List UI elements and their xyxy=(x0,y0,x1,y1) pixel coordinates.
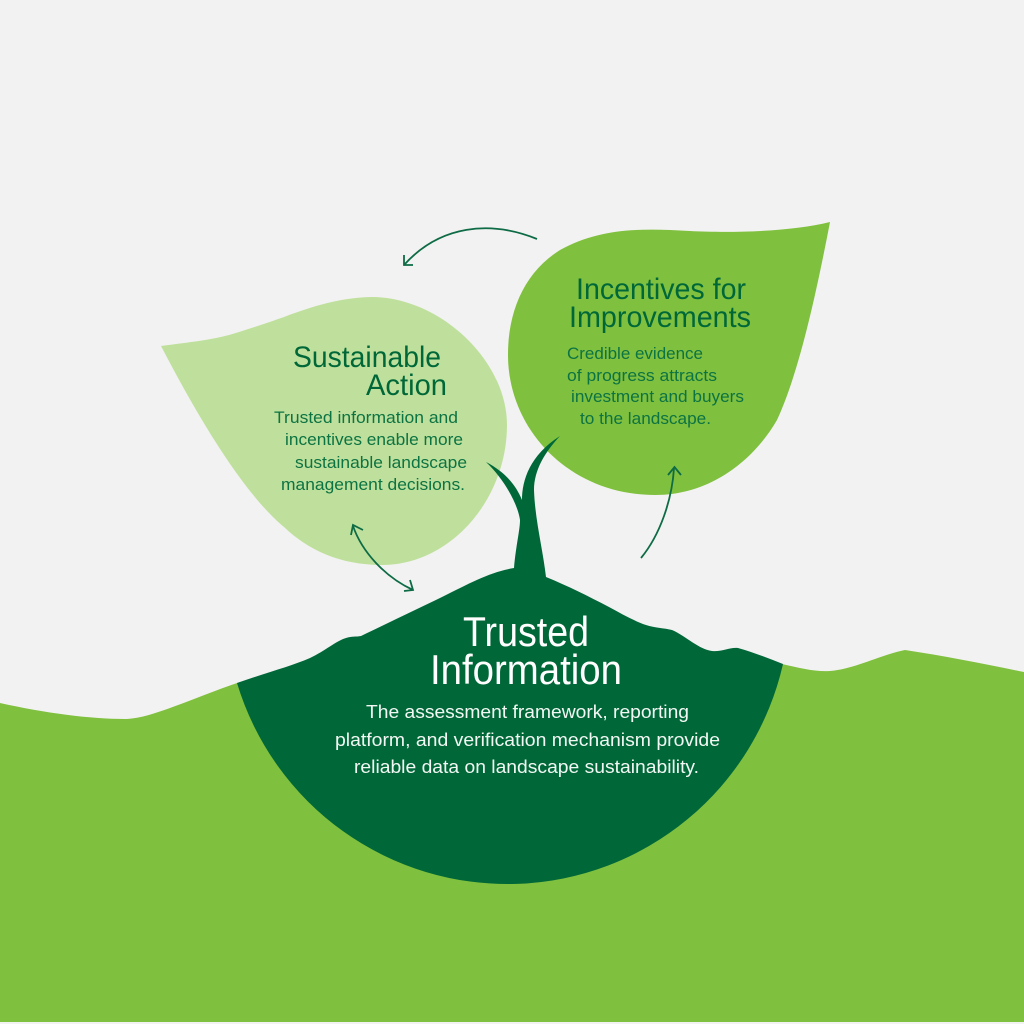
text: trusted information description: reliable data on landscape sustainability. xyxy=(354,757,699,777)
arrow: incentives to action xyxy=(404,228,537,265)
heading: sustainable action: Sustainable xyxy=(293,341,441,374)
heading: trusted information xyxy=(430,608,622,693)
text: sustainable action description: management decisions. xyxy=(281,475,465,494)
text: incentives description: Credible evidence xyxy=(567,344,703,363)
text: trusted information description: The assessment framework, reporting xyxy=(366,702,689,722)
heading: incentives for improvements xyxy=(569,273,751,334)
text: incentives description: of progress attracts xyxy=(567,366,717,385)
arrow: action and information two-way xyxy=(351,525,413,591)
leaf: incentives for improvements xyxy=(508,222,830,495)
text: sustainable action description xyxy=(274,408,467,494)
leaf: sustainable action xyxy=(161,297,507,565)
heading: sustainable action: Action xyxy=(366,369,447,402)
text: incentives description: investment and buyers xyxy=(571,387,744,406)
text: incentives description xyxy=(567,344,744,428)
text: sustainable action description: Trusted information and xyxy=(274,408,458,427)
heading: sustainable action xyxy=(293,341,447,402)
text: trusted information description xyxy=(335,702,720,777)
text: trusted information description: platform, and verification mechanism provide xyxy=(335,730,720,750)
heading: incentives for improvements: Improvements xyxy=(569,301,751,334)
heading: trusted information: Information xyxy=(430,646,622,693)
heading: incentives for improvements: Incentives for xyxy=(576,273,746,306)
text: sustainable action description: sustainable landscape xyxy=(295,453,467,472)
arrow: information to incentives xyxy=(641,467,681,558)
sprout and soil mound xyxy=(237,436,783,884)
text: incentives description: to the landscape. xyxy=(580,409,711,428)
text: sustainable action description: incentives enable more xyxy=(285,430,463,449)
ground: light green hill xyxy=(0,650,1024,1022)
heading: trusted information: Trusted xyxy=(463,608,589,655)
